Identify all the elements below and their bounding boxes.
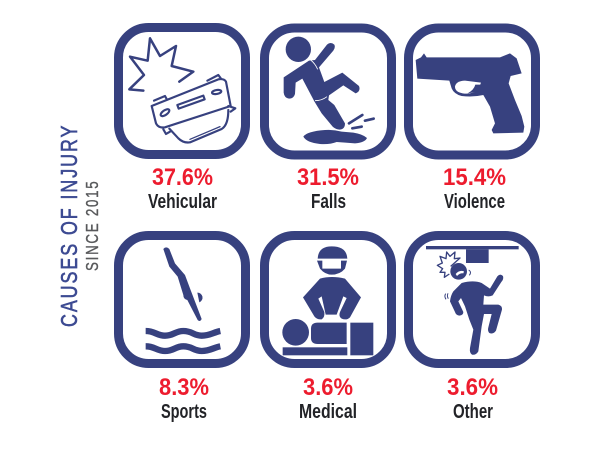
label: Falls xyxy=(311,191,346,213)
percentage: 31.5% xyxy=(297,164,359,191)
icon: diver and water xyxy=(146,247,220,351)
icon frame xyxy=(264,236,392,364)
icon: person hitting head on beam xyxy=(426,246,519,355)
icon frame xyxy=(118,236,246,364)
label: Vehicular xyxy=(148,191,217,213)
label: Violence xyxy=(444,191,505,213)
icon frame xyxy=(264,28,392,155)
heading: CAUSES OF INJURY xyxy=(57,126,83,327)
panel: falls xyxy=(264,28,392,213)
percentage: 15.4% xyxy=(443,164,506,191)
percentage: 8.3% xyxy=(159,374,209,401)
title: causes of injury since 2015 xyxy=(57,126,103,327)
panel: other xyxy=(408,236,536,423)
panel: violence xyxy=(408,28,536,213)
icon frame xyxy=(408,28,536,155)
icon: medic giving CPR xyxy=(282,246,373,355)
icon frame xyxy=(408,236,536,364)
percentage: 37.6% xyxy=(152,164,213,191)
label: Other xyxy=(453,401,493,423)
icon frame xyxy=(118,28,246,154)
subheading: SINCE 2015 xyxy=(83,181,103,271)
icon: overturned car xyxy=(129,38,235,142)
percentage: 3.6% xyxy=(303,374,353,401)
label: Sports xyxy=(161,401,207,423)
icon: person slipping on puddle xyxy=(284,37,374,144)
percentage: 3.6% xyxy=(447,374,498,401)
panel: medical xyxy=(264,236,392,423)
panel: vehicular xyxy=(118,28,246,213)
label: Medical xyxy=(299,401,357,423)
icon: handgun xyxy=(416,53,524,133)
panel: sports xyxy=(118,236,246,423)
